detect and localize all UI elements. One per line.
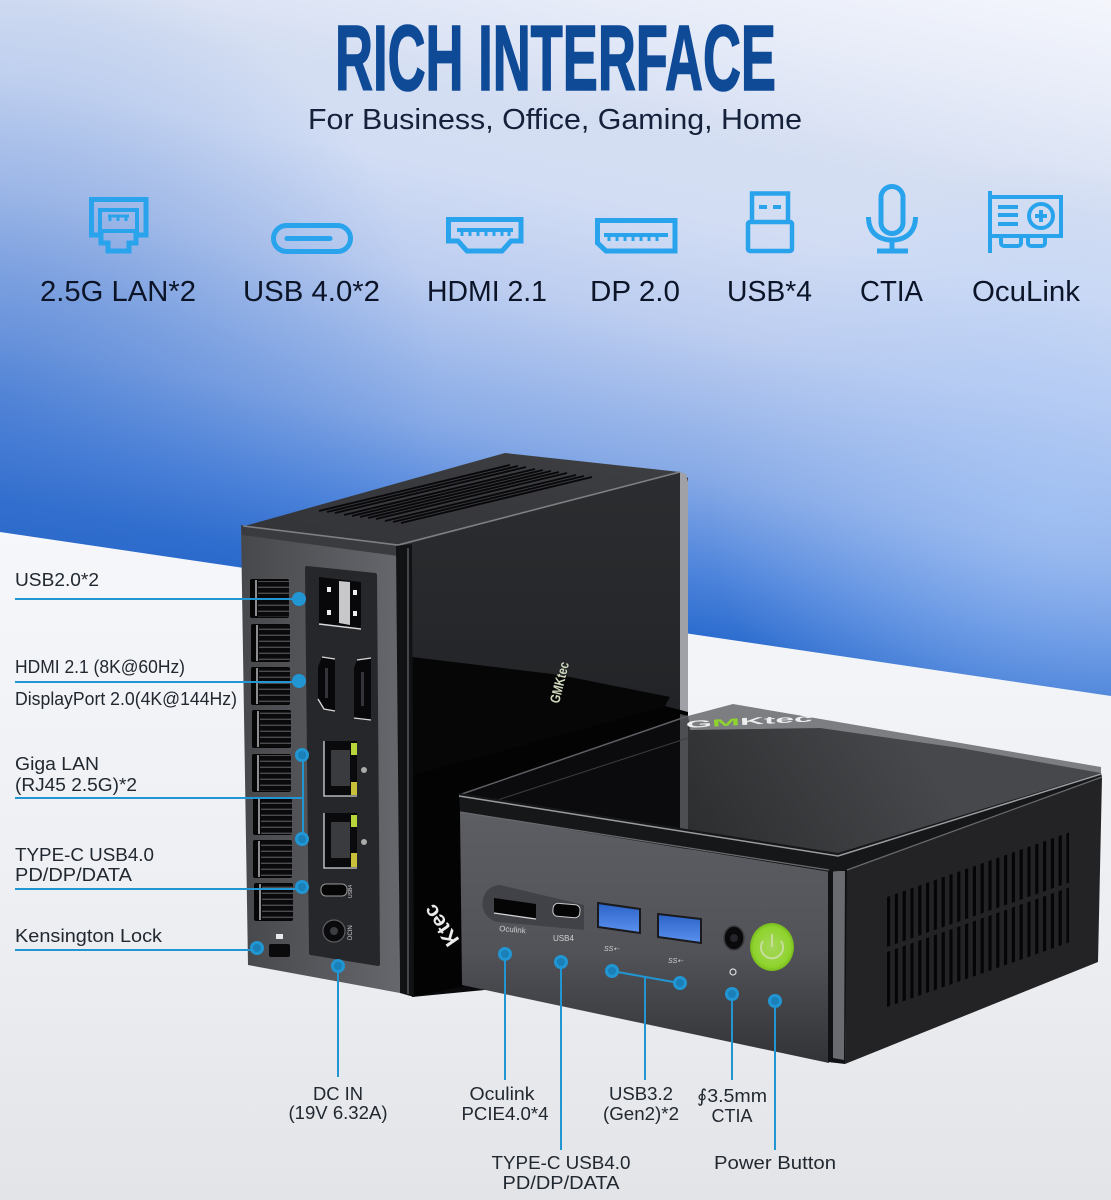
icon: expansion card [990,191,1061,253]
callout: USB3.2: USB3.2 [609,1084,673,1104]
callout: Oculink: PCIE4.0*4 [462,1104,548,1124]
label: CTIA: CTIA [860,276,924,308]
side vents [887,833,1069,1007]
callout: Oculink: Oculink [470,1084,536,1104]
label: HDMI 2.1: HDMI 2.1 [427,276,547,308]
icon: USB-C port [274,226,350,252]
callout: Power Button [714,996,836,1173]
low mini PC [459,704,1102,1064]
Oculink port: Oculink [499,924,527,935]
callout: TYPE-C USB4.0 front: PD/DP/DATA [502,1173,620,1193]
glass edge highlight [680,472,688,716]
label: OcuLink: OcuLink [972,276,1081,308]
glass side panel [400,472,690,997]
vent blocks [250,579,293,921]
callout: HDMI and DisplayPort: DisplayPort 2.0(4K@144Hz) [15,689,237,709]
top rim [241,525,400,556]
icon: microphone [868,186,916,251]
callout: USB3.2: (Gen2)*2 [603,1104,679,1124]
callout: Kensington Lock: Kensington Lock [15,926,163,946]
callout: Kensington Lock [15,926,262,954]
glass top [688,705,1101,855]
callout: USB3.2 [603,966,686,1124]
label: USB 4.0*2: USB 4.0*2 [243,276,380,308]
front face [460,812,829,1063]
USB4 port [552,903,580,943]
callout: TYPE-C USB4.0 front: TYPE-C USB4.0 [492,1153,630,1173]
callout: HDMI and DisplayPort: HDMI 2.1 (8K@60Hz) [15,657,185,677]
USB-C port [321,884,354,898]
callout: USB2.0 [15,570,306,606]
callout: TYPE-C USB4.0 front [492,956,630,1193]
Oculink port [494,898,536,935]
callout: TYPE-C: PD/DP/DATA [15,865,132,885]
USB4 port: USB4 [553,934,574,943]
callout: 3.5mm CTIA: ∮3.5mm [697,1086,767,1106]
reflected black band [412,657,670,775]
background gradient [0,0,1111,760]
glass rim [688,704,1101,773]
icon: USB stick [748,194,792,251]
LAN port 2 [324,813,367,868]
refraction strip [680,714,688,832]
title: RICH INTERFACE [335,6,776,110]
port panel [307,568,378,964]
USB 3.2 port 1 [598,903,640,953]
corner strip [396,544,414,997]
top vents [319,465,592,523]
callout: Giga LAN: (RJ45 2.5G)*2 [15,775,137,795]
label: DP 2.0: DP 2.0 [590,276,680,308]
white floor [0,532,1111,1200]
glass top left part [459,716,688,832]
callout: 3.5mm CTIA: CTIA [712,1106,752,1126]
USB 3.2 port 1: SS⇠ [604,946,620,953]
callout: USB2.0: USB2.0*2 [15,570,99,590]
icon: DisplayPort [598,220,675,251]
port face [241,527,400,993]
USB 3.2 port 2: SS⇠ [668,958,684,965]
USB 3.2 port 2 [658,914,701,965]
callout: TYPE-C: TYPE-C USB4.0 [15,845,154,865]
DisplayPort port [354,658,371,720]
callout: DC IN [288,960,388,1123]
reflected logo: GMKtec [546,660,572,705]
power button [750,923,794,971]
HDMI port [318,657,335,711]
audio jack [724,926,744,975]
brand logo: G M Ktec [686,713,814,731]
top face [241,453,680,546]
callout: 3.5mm CTIA [697,988,767,1126]
USB-C port: USB4 [348,885,354,898]
icon: HDMI port [448,220,521,251]
subtitle: For Business, Office, Gaming, Home [308,104,802,136]
callout: Giga LAN [15,750,308,844]
callout: DC IN: (19V 6.32A) [288,1103,388,1123]
callout: DC IN: DC IN [313,1084,363,1104]
label: 2.5G LAN*2: 2.5G LAN*2 [40,276,196,308]
glass front lip [459,773,1102,872]
callout: HDMI and DisplayPort [15,657,306,709]
callout: Power Button: Power Button [714,1153,836,1173]
USB 2.0 ports [319,577,361,629]
callout: Oculink [462,948,548,1124]
callout: TYPE-C [15,845,308,892]
label: USB*4: USB*4 [727,276,812,308]
icon: LAN port [92,200,146,251]
reflected logo lower: Ktec [419,900,464,950]
LAN port 1 [324,741,367,796]
side face [845,777,1102,1064]
DC port: DCIN [348,925,354,940]
DC port [323,920,354,942]
corner strip [828,870,847,1064]
Oculink recess [482,885,584,930]
Kensington lock [269,934,290,957]
vertical mini PC [241,453,690,997]
callout: Giga LAN: Giga LAN [15,754,99,774]
